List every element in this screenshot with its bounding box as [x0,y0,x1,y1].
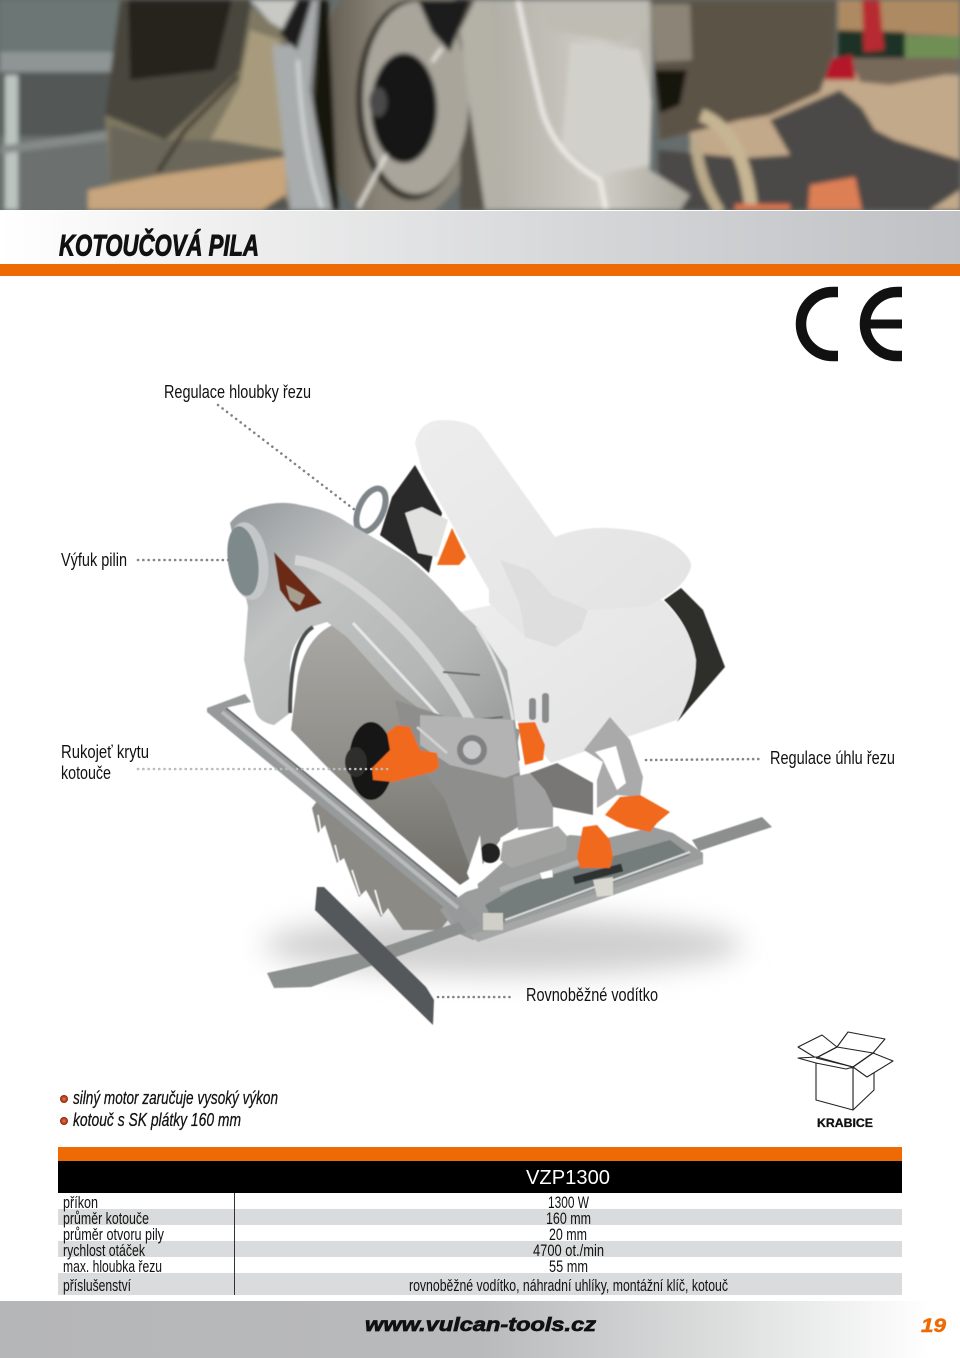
saw: lever rod [417,727,447,753]
spec table: průměr otvoru pily [63,1225,164,1244]
spec table: rychlost otáček [63,1241,145,1260]
label: guard handle [61,742,388,783]
label: cut angle: Regulace úhlu řezu [770,748,895,768]
saw: rip fence bar [267,922,466,988]
feature list: silný motor zaručuje vysoký výkon [73,1088,278,1108]
spec table: max. hloubka řezu [63,1257,162,1276]
spec table: 55 mm [549,1257,588,1276]
product shadow [263,915,743,975]
footer band [0,1301,960,1358]
feature list: kotouč s SK plátky 160 mm [73,1110,241,1130]
spec table: průměr kotouče [63,1209,149,1228]
label: guard handle: kotouče [61,763,111,783]
saw: handle shading [500,560,588,647]
saw: brand badge [274,552,322,612]
label: guard handle: Rukojeť krytu [61,742,149,762]
spec table: příkon [63,1193,98,1212]
spec table: 20 mm [549,1225,587,1244]
saw: adjustment hole [457,735,487,765]
saw: left rail [207,694,480,935]
page number: 19 [921,1316,947,1337]
spec table: 160 mm [546,1209,591,1228]
photo: saw cutting wood [0,0,960,223]
box label: KRABICE [817,1116,873,1130]
title: KOTOUČOVÁ PILA [59,228,259,262]
orange header stripe [0,264,960,276]
saw: lifting ring [350,484,392,536]
saw: blade upper disc [291,622,520,885]
saw: orange blade lever [372,725,439,782]
spec table [58,1193,902,1295]
saw: column [513,772,553,830]
spec table: 1300 W [548,1193,589,1212]
saw: angle bracket [584,717,643,808]
footer url: www.vulcan-tools.cz [365,1315,597,1336]
saw: strut [530,763,593,815]
saw: handle [415,420,691,647]
saw: rear trigger [380,465,466,573]
saw: lower housing [395,700,520,875]
saw: motor body [459,590,696,763]
illustration: circular saw [207,420,772,1025]
saw: blade teeth [312,790,460,930]
saw: vents [529,693,549,723]
saw: motor end cap [664,588,725,722]
table header [58,1161,902,1193]
saw: guard highlights [290,560,513,720]
spec table: příslušenství [63,1276,131,1295]
saw: hub [345,722,393,800]
spec table: rovnoběžné vodítko, náhradní uhlíky, montážní klíč, kotouč [409,1276,728,1295]
icon: CE mark [801,292,902,356]
table orange bar [58,1147,902,1161]
saw: right fence bar [692,817,772,851]
saw: orange depth clamp [577,825,613,868]
saw: blade guard [230,503,520,775]
saw: housing upper panel [420,715,520,778]
saw: orange knob [518,722,545,765]
saw: orange angle clamp [605,795,670,832]
label: cut depth [164,382,355,510]
table header: VZP1300 [526,1167,610,1189]
saw: dust port [223,520,273,602]
saw: base plate [440,827,703,942]
feature list [60,1088,278,1130]
spec table: 4700 ot./min [533,1241,604,1260]
label: cut depth: Regulace hloubky řezu [164,382,311,402]
icon: box [798,1032,893,1110]
saw: pivot cylinder [457,826,567,893]
header band [0,211,960,264]
label: dust exhaust: Výfuk pilin [61,550,127,570]
saw: cross fence [315,887,434,1025]
label: parallel guide: Rovnoběžné vodítko [526,985,658,1005]
